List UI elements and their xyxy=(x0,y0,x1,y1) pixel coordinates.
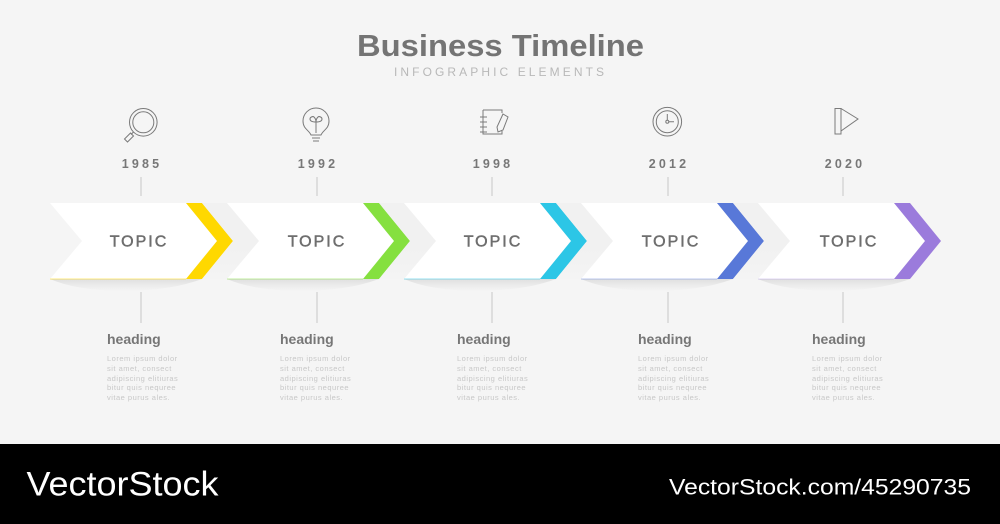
base line xyxy=(404,278,540,280)
heading: heading xyxy=(107,331,161,347)
shadow xyxy=(758,279,910,291)
body text: adipiscing elitiuras xyxy=(638,374,709,383)
topic label: TOPIC xyxy=(642,234,700,250)
connector top xyxy=(316,177,318,196)
body text: bitur quis nequree xyxy=(107,383,176,392)
body text: adipiscing elitiuras xyxy=(457,374,528,383)
timeline item 2012 xyxy=(556,107,764,402)
body text: sit amet, consect xyxy=(107,364,172,373)
notch shade xyxy=(556,203,613,279)
body text: bitur quis nequree xyxy=(457,383,526,392)
icon: flag xyxy=(835,108,858,134)
arrow chevron xyxy=(894,203,941,279)
year: 1992 xyxy=(298,157,338,171)
notch shade xyxy=(379,203,436,279)
body text: vitae purus ales. xyxy=(107,393,170,402)
connector top xyxy=(842,177,844,196)
footer url: VectorStock.com/45290735 xyxy=(669,474,971,500)
connector top xyxy=(492,177,493,196)
year: 1998 xyxy=(473,157,513,171)
subtitle: INFOGRAPHIC ELEMENTS xyxy=(394,65,604,79)
notch shade xyxy=(733,203,790,279)
body text: sit amet, consect xyxy=(280,364,345,373)
shadow xyxy=(227,279,379,291)
body text: vitae purus ales. xyxy=(280,393,343,402)
arrow body xyxy=(581,203,748,279)
arrow body xyxy=(758,203,925,279)
body text: Lorem ipsum dolor xyxy=(638,354,709,363)
heading: heading xyxy=(280,331,334,347)
base line xyxy=(581,278,717,280)
notch shade xyxy=(202,203,259,279)
timeline item 1985 xyxy=(50,108,233,402)
body text: Lorem ipsum dolor xyxy=(457,354,528,363)
shadow xyxy=(581,279,733,291)
body text: sit amet, consect xyxy=(638,364,703,373)
arrow chevron xyxy=(540,203,587,279)
topic label: TOPIC xyxy=(288,234,346,250)
arrow body xyxy=(50,203,217,279)
connector bottom xyxy=(316,292,318,323)
body text: sit amet, consect xyxy=(812,364,877,373)
body text: adipiscing elitiuras xyxy=(812,374,883,383)
year: 2020 xyxy=(825,157,865,171)
connector bottom xyxy=(842,292,844,323)
body text: bitur quis nequree xyxy=(638,383,707,392)
timeline item 2020 xyxy=(733,108,941,402)
icon: magnifier xyxy=(124,108,157,142)
body text: Lorem ipsum dolor xyxy=(280,354,351,363)
icon: clock xyxy=(653,107,682,136)
heading: heading xyxy=(457,331,511,347)
body text: adipiscing elitiuras xyxy=(107,374,178,383)
arrow body xyxy=(404,203,571,279)
body text: bitur quis nequree xyxy=(812,383,881,392)
base line xyxy=(50,278,186,280)
connector top xyxy=(140,177,142,196)
body text: bitur quis nequree xyxy=(280,383,349,392)
topic label: TOPIC xyxy=(110,234,168,250)
timeline item 1998 xyxy=(379,110,587,402)
body text: adipiscing elitiuras xyxy=(280,374,351,383)
icon: notebook and pencil xyxy=(480,110,508,134)
connector bottom xyxy=(140,292,142,323)
body text: vitae purus ales. xyxy=(638,393,701,402)
heading: heading xyxy=(812,331,866,347)
footer logo: VectorStock xyxy=(26,466,219,504)
topic label: TOPIC xyxy=(464,234,522,250)
arrow chevron xyxy=(717,203,764,279)
footer bar xyxy=(0,444,1000,524)
heading: heading xyxy=(638,331,692,347)
arrow chevron xyxy=(363,203,410,279)
body text: sit amet, consect xyxy=(457,364,522,373)
timeline item 1992 xyxy=(202,108,410,402)
topic label: TOPIC xyxy=(820,234,878,250)
connector bottom xyxy=(668,292,669,323)
base line xyxy=(758,278,894,280)
body text: Lorem ipsum dolor xyxy=(812,354,883,363)
shadow xyxy=(50,279,202,291)
connector bottom xyxy=(492,292,493,323)
icon: light bulb xyxy=(303,108,329,141)
shadow xyxy=(404,279,556,291)
arrow body xyxy=(227,203,394,279)
body text: Lorem ipsum dolor xyxy=(107,354,178,363)
body text: vitae purus ales. xyxy=(812,393,875,402)
connector top xyxy=(668,177,669,196)
body text: vitae purus ales. xyxy=(457,393,520,402)
year: 1985 xyxy=(122,157,162,171)
title: Business Timeline xyxy=(357,28,644,63)
year: 2012 xyxy=(649,157,689,171)
base line xyxy=(227,278,363,280)
arrow chevron xyxy=(186,203,233,279)
